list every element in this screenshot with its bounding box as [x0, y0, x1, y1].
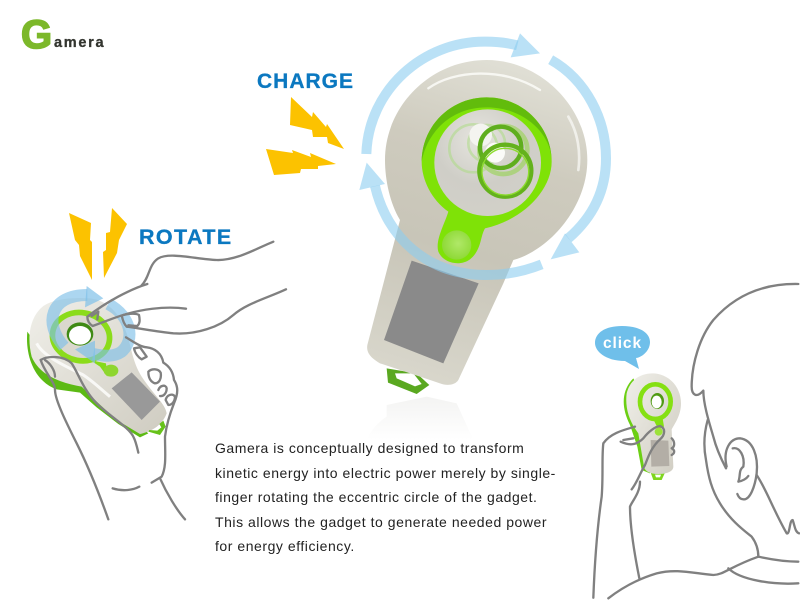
logo: Gamera: amera [54, 35, 105, 51]
device highlights [428, 74, 579, 170]
screen [112, 372, 160, 420]
small device green edge [624, 378, 650, 473]
green ring [640, 384, 671, 419]
large device reflection [367, 397, 473, 440]
green ring tail [90, 360, 107, 377]
description text: for energy efficiency. [215, 538, 355, 554]
description text: Gamera is conceptually designed to transform [215, 440, 524, 456]
logo: Gamera: G [21, 13, 52, 57]
rotation arrows [52, 295, 129, 356]
green ring [49, 308, 113, 365]
green ring with button tail [422, 97, 552, 263]
ear outline [726, 438, 757, 499]
small device body [626, 373, 681, 474]
clip [148, 421, 166, 435]
rotation arrows around large device [359, 33, 606, 275]
speech bubble: click [595, 326, 650, 369]
head outline [608, 284, 799, 598]
faint ghost rings [449, 124, 527, 174]
speech bubble: click: click [603, 335, 642, 352]
heading: ROTATE: ROTATE [139, 225, 233, 249]
large device [367, 60, 587, 394]
button [655, 428, 663, 436]
icon: lightning bolts for rotate [69, 208, 127, 280]
description text [215, 440, 556, 554]
clip [651, 473, 665, 480]
heading: CHARGE: CHARGE [257, 70, 354, 93]
holding hand outline [41, 337, 185, 519]
textured window [434, 109, 541, 216]
click hand outline [593, 426, 674, 598]
eccentric green rings [479, 127, 531, 197]
scene: click beside head [593, 284, 799, 598]
hole [67, 322, 93, 346]
screen [651, 440, 669, 467]
small device body [29, 298, 167, 434]
logo: Gamera [21, 13, 105, 57]
description text: This allows the gadget to generate needed power [215, 514, 547, 530]
hole [651, 393, 664, 409]
screen [384, 261, 479, 363]
highlight [37, 343, 110, 397]
description text: finger rotating the eccentric circle of the gadget. [215, 489, 537, 505]
icon: lightning bolts for charge [266, 97, 344, 175]
pointing hand outline [87, 242, 286, 334]
scene: rotate in hand [27, 242, 286, 519]
device clip loop [387, 368, 429, 394]
description text: kinetic energy into electric power merely by single- [215, 464, 556, 480]
small device underside [27, 332, 148, 437]
device body [367, 60, 587, 385]
green button [442, 230, 471, 260]
button [104, 365, 118, 377]
